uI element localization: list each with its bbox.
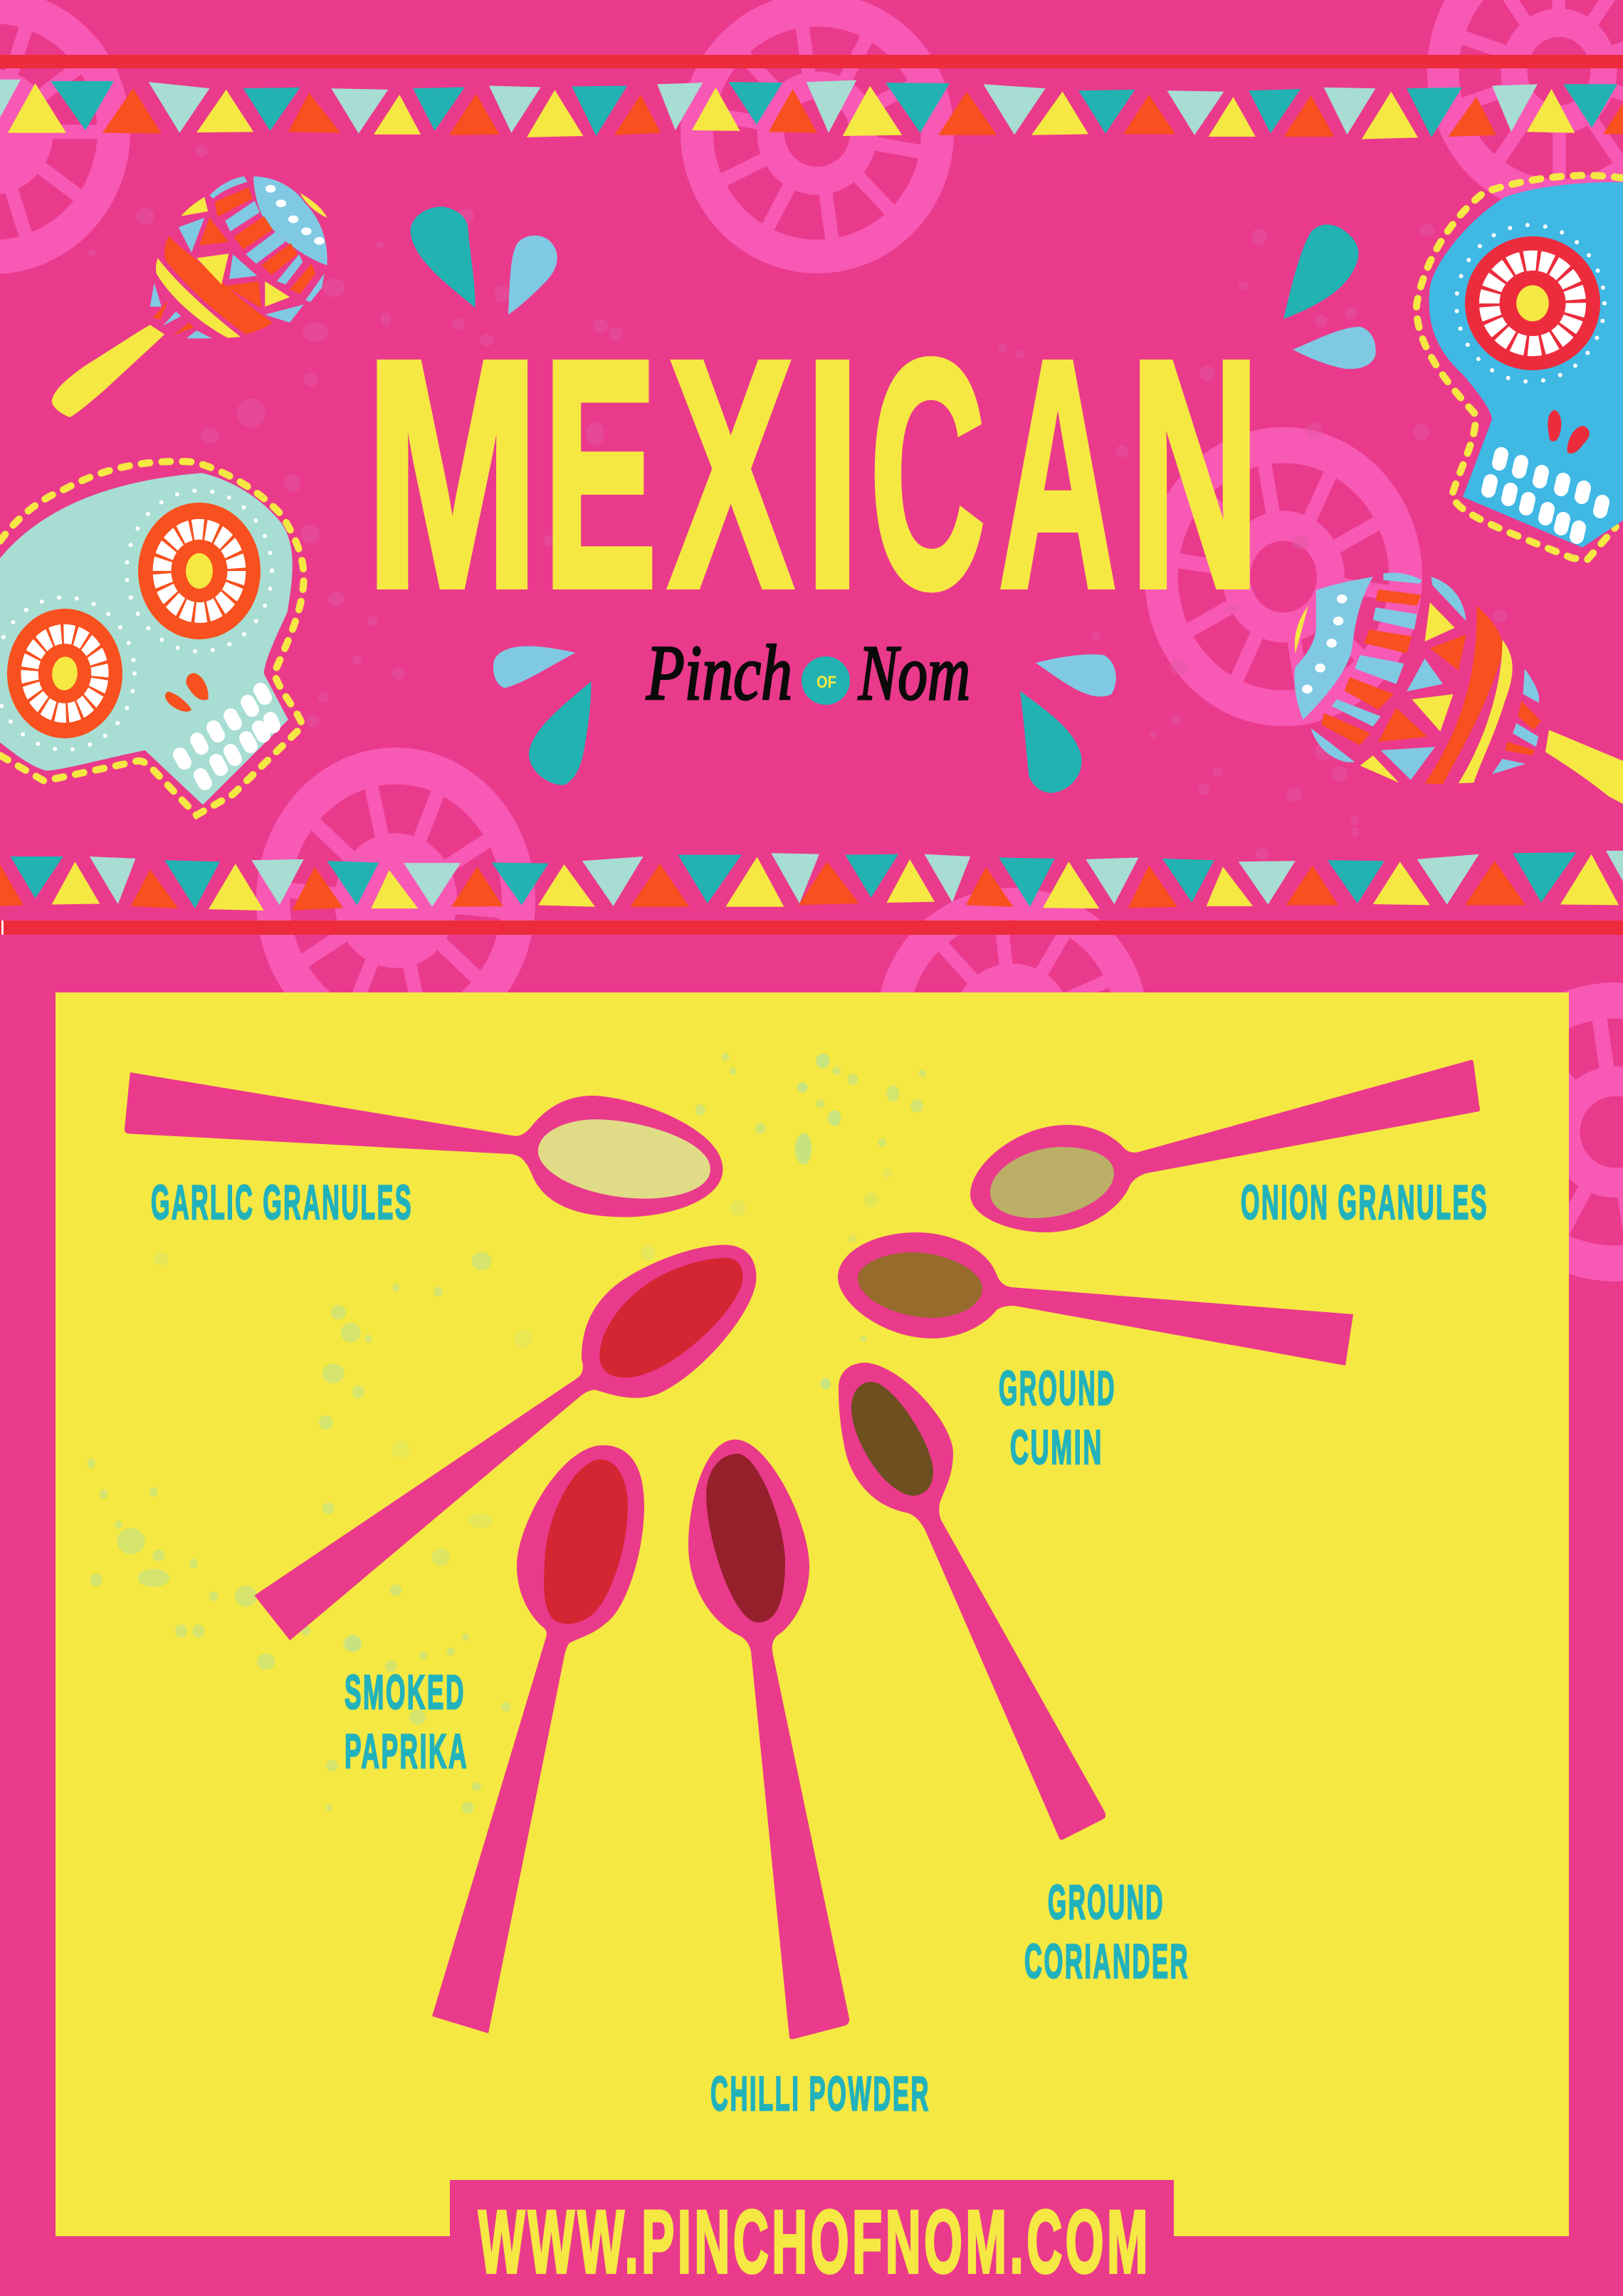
title: A (999, 293, 1117, 655)
label: chilli powder: CHILLI POWDER (710, 2067, 930, 2121)
panel: yellow spices panel (56, 992, 1569, 2236)
top bunting (0, 80, 1623, 140)
nose (165, 673, 209, 712)
spoon: onion granules (970, 1060, 1480, 1232)
title: C (870, 293, 985, 655)
spoon: ground cumin (838, 1232, 1353, 1365)
lower bunting (0, 851, 1623, 911)
label: smoked paprika: SMOKED (345, 1665, 466, 1719)
icon: teardrops lower left (493, 646, 591, 785)
label: smoked paprika: PAPRIKA (345, 1724, 468, 1778)
top red band (0, 55, 1623, 68)
icon: teardrops top right (1283, 224, 1376, 369)
panel splatter (87, 1053, 926, 1813)
lower eye (0, 600, 130, 747)
logo badge: OF (816, 673, 836, 692)
wheel: behind title (1145, 428, 1422, 725)
title: M (365, 293, 540, 655)
title (365, 293, 1260, 655)
logo badge (802, 656, 850, 705)
spoon: garlic granules (125, 1072, 723, 1217)
eye (1465, 236, 1600, 370)
teeth (1488, 454, 1602, 537)
nose (1548, 410, 1590, 454)
label: ground coriander: GROUND (1048, 1875, 1165, 1929)
background papel wheels (0, 0, 1623, 1284)
wheel: top left (0, 6, 114, 257)
logo: Pinch of Nom (646, 629, 970, 716)
label: ground coriander (1024, 1875, 1189, 1988)
wheel: top right (1413, 0, 1623, 229)
icon: teardrops top left (411, 206, 557, 315)
icon: teardrops lower right (1020, 654, 1116, 793)
wheel: right edge (1464, 980, 1623, 1284)
label: ground coriander: CORIANDER (1024, 1934, 1189, 1988)
title: X (668, 293, 794, 655)
icon: blue sugar skull (1417, 176, 1623, 560)
wheel: lower left (263, 755, 529, 1047)
spoon: smoked paprika (432, 1445, 644, 2033)
wheel: top centre (678, 0, 957, 276)
title: I (804, 293, 861, 655)
wheel: lower right (871, 882, 1153, 1164)
icon: maraca top left (52, 177, 327, 417)
logo word Nom: Nom (858, 629, 970, 716)
lower red band (0, 921, 1623, 935)
icon: maraca lower right (1294, 572, 1623, 810)
panel: yellow spices panel: GARLIC GRANULES (151, 1175, 413, 1230)
spoon: red large (254, 1244, 756, 1640)
label: ground cumin: CUMIN (1010, 1420, 1103, 1474)
footer tab with website (450, 2180, 1174, 2292)
spoon: chilli powder (688, 1440, 849, 2039)
title: N (1130, 293, 1260, 655)
label: smoked paprika (345, 1665, 468, 1778)
icon: mint sugar skull (0, 461, 304, 815)
panel: yellow spices panel: GROUND (999, 1361, 1116, 1415)
teeth (180, 690, 273, 783)
header paint splatter (88, 145, 1507, 860)
spoon: ground coriander (839, 1363, 1105, 1840)
title: E (543, 293, 657, 655)
logo word Pinch: Pinch (646, 629, 792, 716)
label: ground cumin (999, 1361, 1116, 1474)
upper eye (138, 503, 261, 639)
